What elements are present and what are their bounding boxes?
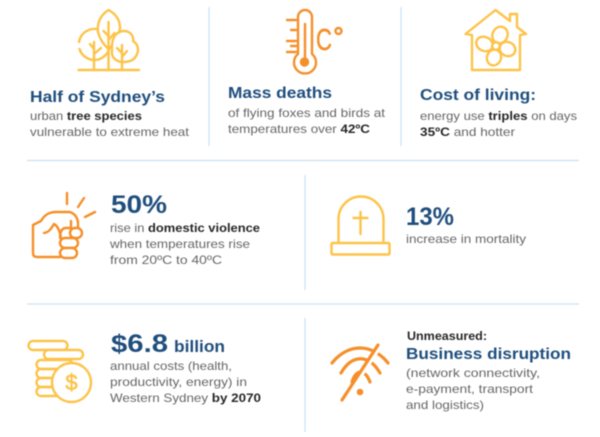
icon: gravestone: [332, 196, 390, 254]
icon: wifi crossed out: [332, 345, 388, 400]
icon: trees: [78, 10, 139, 70]
text block: [109, 221, 260, 267]
statistic: $6.8: [111, 330, 168, 358]
text block: temperatures over 42ºC: [228, 122, 370, 136]
text block: [30, 109, 190, 139]
statistic: 50%: [111, 191, 167, 219]
text block: 35ºC and hotter: [420, 125, 515, 139]
icon: thermometer: [287, 10, 342, 73]
text block: and logistics): [406, 398, 484, 412]
icon: house with fan: [466, 10, 526, 70]
text block: [228, 106, 386, 136]
statistic: [111, 330, 225, 358]
text block: increase in mortality: [406, 232, 526, 246]
panel: domestic violence: [33, 191, 260, 267]
text block: [406, 366, 540, 412]
icon: coins: [28, 341, 91, 402]
text block: Western Sydney by 2070: [110, 391, 261, 405]
text block: [420, 109, 577, 139]
text block: vulnerable to extreme heat: [30, 125, 190, 139]
statistic: billion: [174, 337, 225, 356]
panel: mortality: [332, 196, 526, 254]
text block: when temperatures rise: [109, 237, 250, 251]
heading: Cost of living:: [420, 87, 536, 104]
text block: from 20ºC to 40ºC: [110, 253, 222, 267]
text block: of flying foxes and birds at: [228, 106, 386, 120]
icon: coins: $: [65, 370, 78, 395]
text block: e-payment, transport: [406, 382, 534, 396]
heading: Mass deaths: [228, 85, 332, 102]
text block: (network connectivity,: [406, 366, 540, 380]
text block: annual costs (health,: [110, 359, 232, 373]
label: Unmeasured:: [407, 331, 487, 343]
text block: productivity, energy) in: [110, 375, 247, 389]
icon: thermometer: C: [316, 22, 332, 57]
panel: mass deaths: [228, 10, 386, 136]
text block: urban tree species: [30, 109, 142, 123]
icon: fist: [33, 193, 95, 258]
statistic: 13%: [406, 203, 454, 231]
text block: rise in domestic violence: [110, 221, 260, 235]
text block: [110, 359, 261, 405]
heading: Half of Sydney’s: [30, 89, 165, 106]
panel: business disruption: [332, 331, 571, 412]
heading: Business disruption: [406, 346, 571, 363]
panel: annual costs: [28, 330, 261, 405]
panel: tree species: [30, 10, 190, 139]
panel: cost of living: [420, 10, 577, 139]
text block: energy use triples on days: [420, 109, 577, 123]
